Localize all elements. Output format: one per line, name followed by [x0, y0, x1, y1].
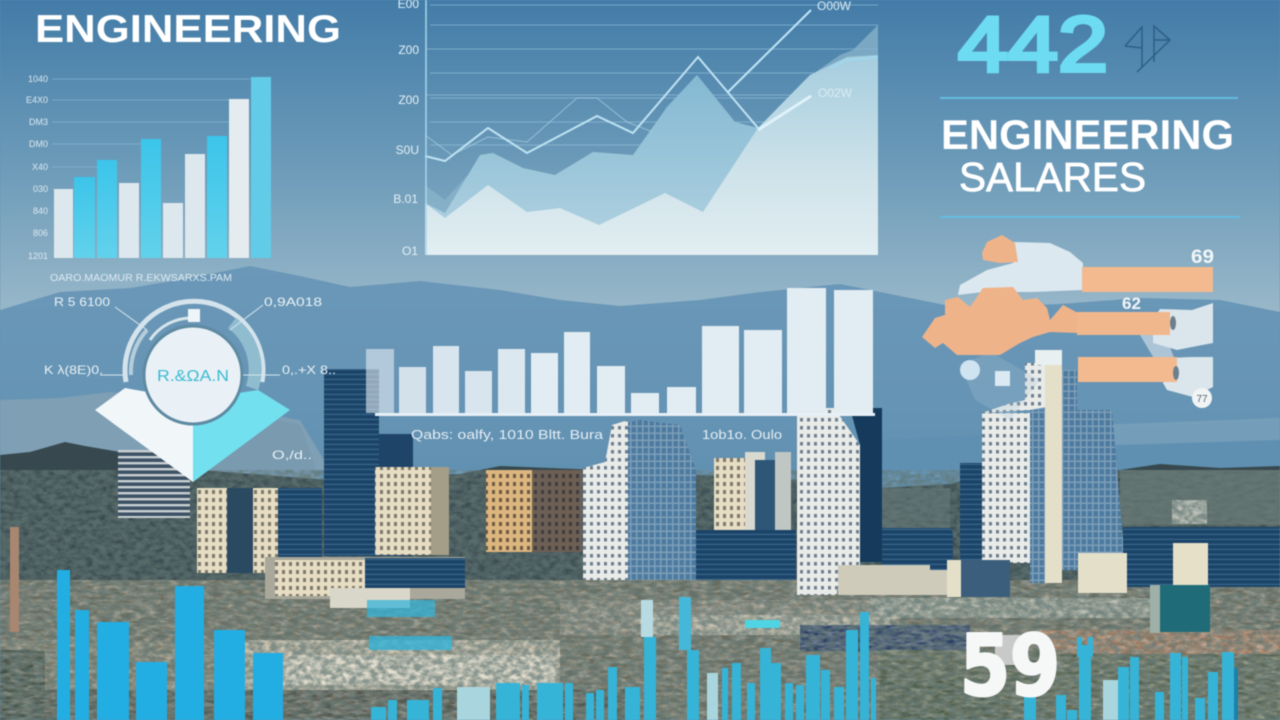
centre area chart [393, 0, 878, 258]
white diamond half [95, 388, 193, 482]
back area [425, 25, 878, 255]
value badge: 77 [1196, 394, 1208, 405]
chart caption right: 1ob1o. Oulo [702, 427, 782, 442]
value labels: 69 [1191, 247, 1214, 268]
chart caption left: Qabs: oalfy, 1010 Bltt. Bura [411, 427, 604, 442]
heading: engineering salaries [941, 111, 1234, 200]
axis labels: B.01 [393, 192, 418, 206]
mountain range [0, 266, 1280, 500]
centre circle [144, 326, 242, 424]
bar 3 [1078, 357, 1177, 382]
centre white bar chart [366, 288, 875, 442]
gauge labels: 0,.+X 8.. [282, 363, 336, 377]
heading: engineering salaries: SALARES [959, 154, 1146, 200]
ground: city and foliage [0, 442, 1280, 720]
vertical axis [425, 0, 427, 255]
gridlines [426, 5, 878, 145]
y axis labels: DM3 [29, 117, 48, 127]
skyline buildings left [118, 369, 582, 608]
centre area chart: O02W [818, 86, 853, 100]
front area [425, 55, 878, 255]
right bottom blue bars [1024, 637, 1238, 720]
title heading: ENGINEERING [35, 8, 341, 51]
axis labels: Z00 [398, 93, 419, 107]
bars [54, 77, 271, 258]
y axis labels: 030 [33, 184, 48, 194]
bar 2 [1077, 312, 1170, 335]
orange region [922, 287, 1078, 355]
donut gauge [44, 295, 336, 482]
gridlines [52, 79, 250, 189]
small hexagon [960, 360, 980, 380]
gauge labels: K λ(8E)0. [44, 363, 103, 377]
trend lines [425, 10, 878, 161]
stat: 442: 442 [958, 0, 1108, 88]
y axis labels: X40 [32, 162, 48, 172]
skyline buildings right [930, 350, 1280, 633]
gauge labels [44, 295, 336, 462]
leader lines [100, 305, 280, 375]
icon: up and down arrows [1125, 26, 1170, 72]
y axis labels [26, 74, 48, 261]
left bar chart [26, 74, 271, 284]
gauge labels: R 5 6100 [54, 295, 110, 309]
bar end caps [1170, 316, 1179, 380]
heading: engineering salaries: ENGINEERING [941, 111, 1234, 158]
grey backing between digits [995, 635, 1020, 665]
small square [995, 371, 1010, 386]
divider top [940, 97, 1238, 99]
divider bottom [940, 216, 1240, 218]
chart caption: OARO.MAOMUR R.EKWSARXS.PAM [50, 273, 232, 284]
middle area [425, 75, 758, 255]
cloud region [958, 242, 1083, 295]
bars [366, 288, 873, 413]
map with horizontal bars: 62 [1122, 294, 1141, 313]
white connector shapes [1140, 303, 1213, 397]
skyline buildings centre [583, 408, 952, 595]
y axis labels: 1040 [28, 74, 48, 84]
digits: 59 [960, 617, 1060, 715]
value badge [1192, 388, 1212, 408]
y axis labels: 840 [33, 206, 48, 216]
inner ring arcs [131, 330, 147, 375]
y axis labels: 806 [33, 228, 48, 238]
axis labels: Z00 [398, 43, 419, 57]
baseline [375, 413, 875, 416]
small marker [188, 309, 200, 322]
background sky [0, 0, 1280, 320]
centre bottom blue bars [367, 597, 876, 720]
teal segment [232, 323, 255, 388]
translucent shape [960, 352, 1040, 420]
axis labels [393, 0, 419, 258]
y axis labels: 1201 [28, 251, 48, 261]
left bottom blue bars [57, 570, 283, 720]
bar 1 [1082, 267, 1213, 292]
map with horizontal bars [922, 235, 1214, 420]
y axis labels: DM0 [29, 139, 48, 149]
stat: 59 [960, 617, 1060, 715]
centre label: R.&ΩA.N [157, 368, 229, 385]
gauge labels: 0,9A018 [264, 295, 322, 309]
y axis labels: E4X0 [26, 95, 48, 105]
cyan diamond half [193, 390, 290, 482]
gauge labels: O,/d.. [272, 448, 312, 462]
outer ring [125, 301, 263, 382]
axis labels: O1 [402, 244, 418, 258]
axis labels: S0U [396, 143, 419, 157]
orange top blob [982, 235, 1018, 263]
